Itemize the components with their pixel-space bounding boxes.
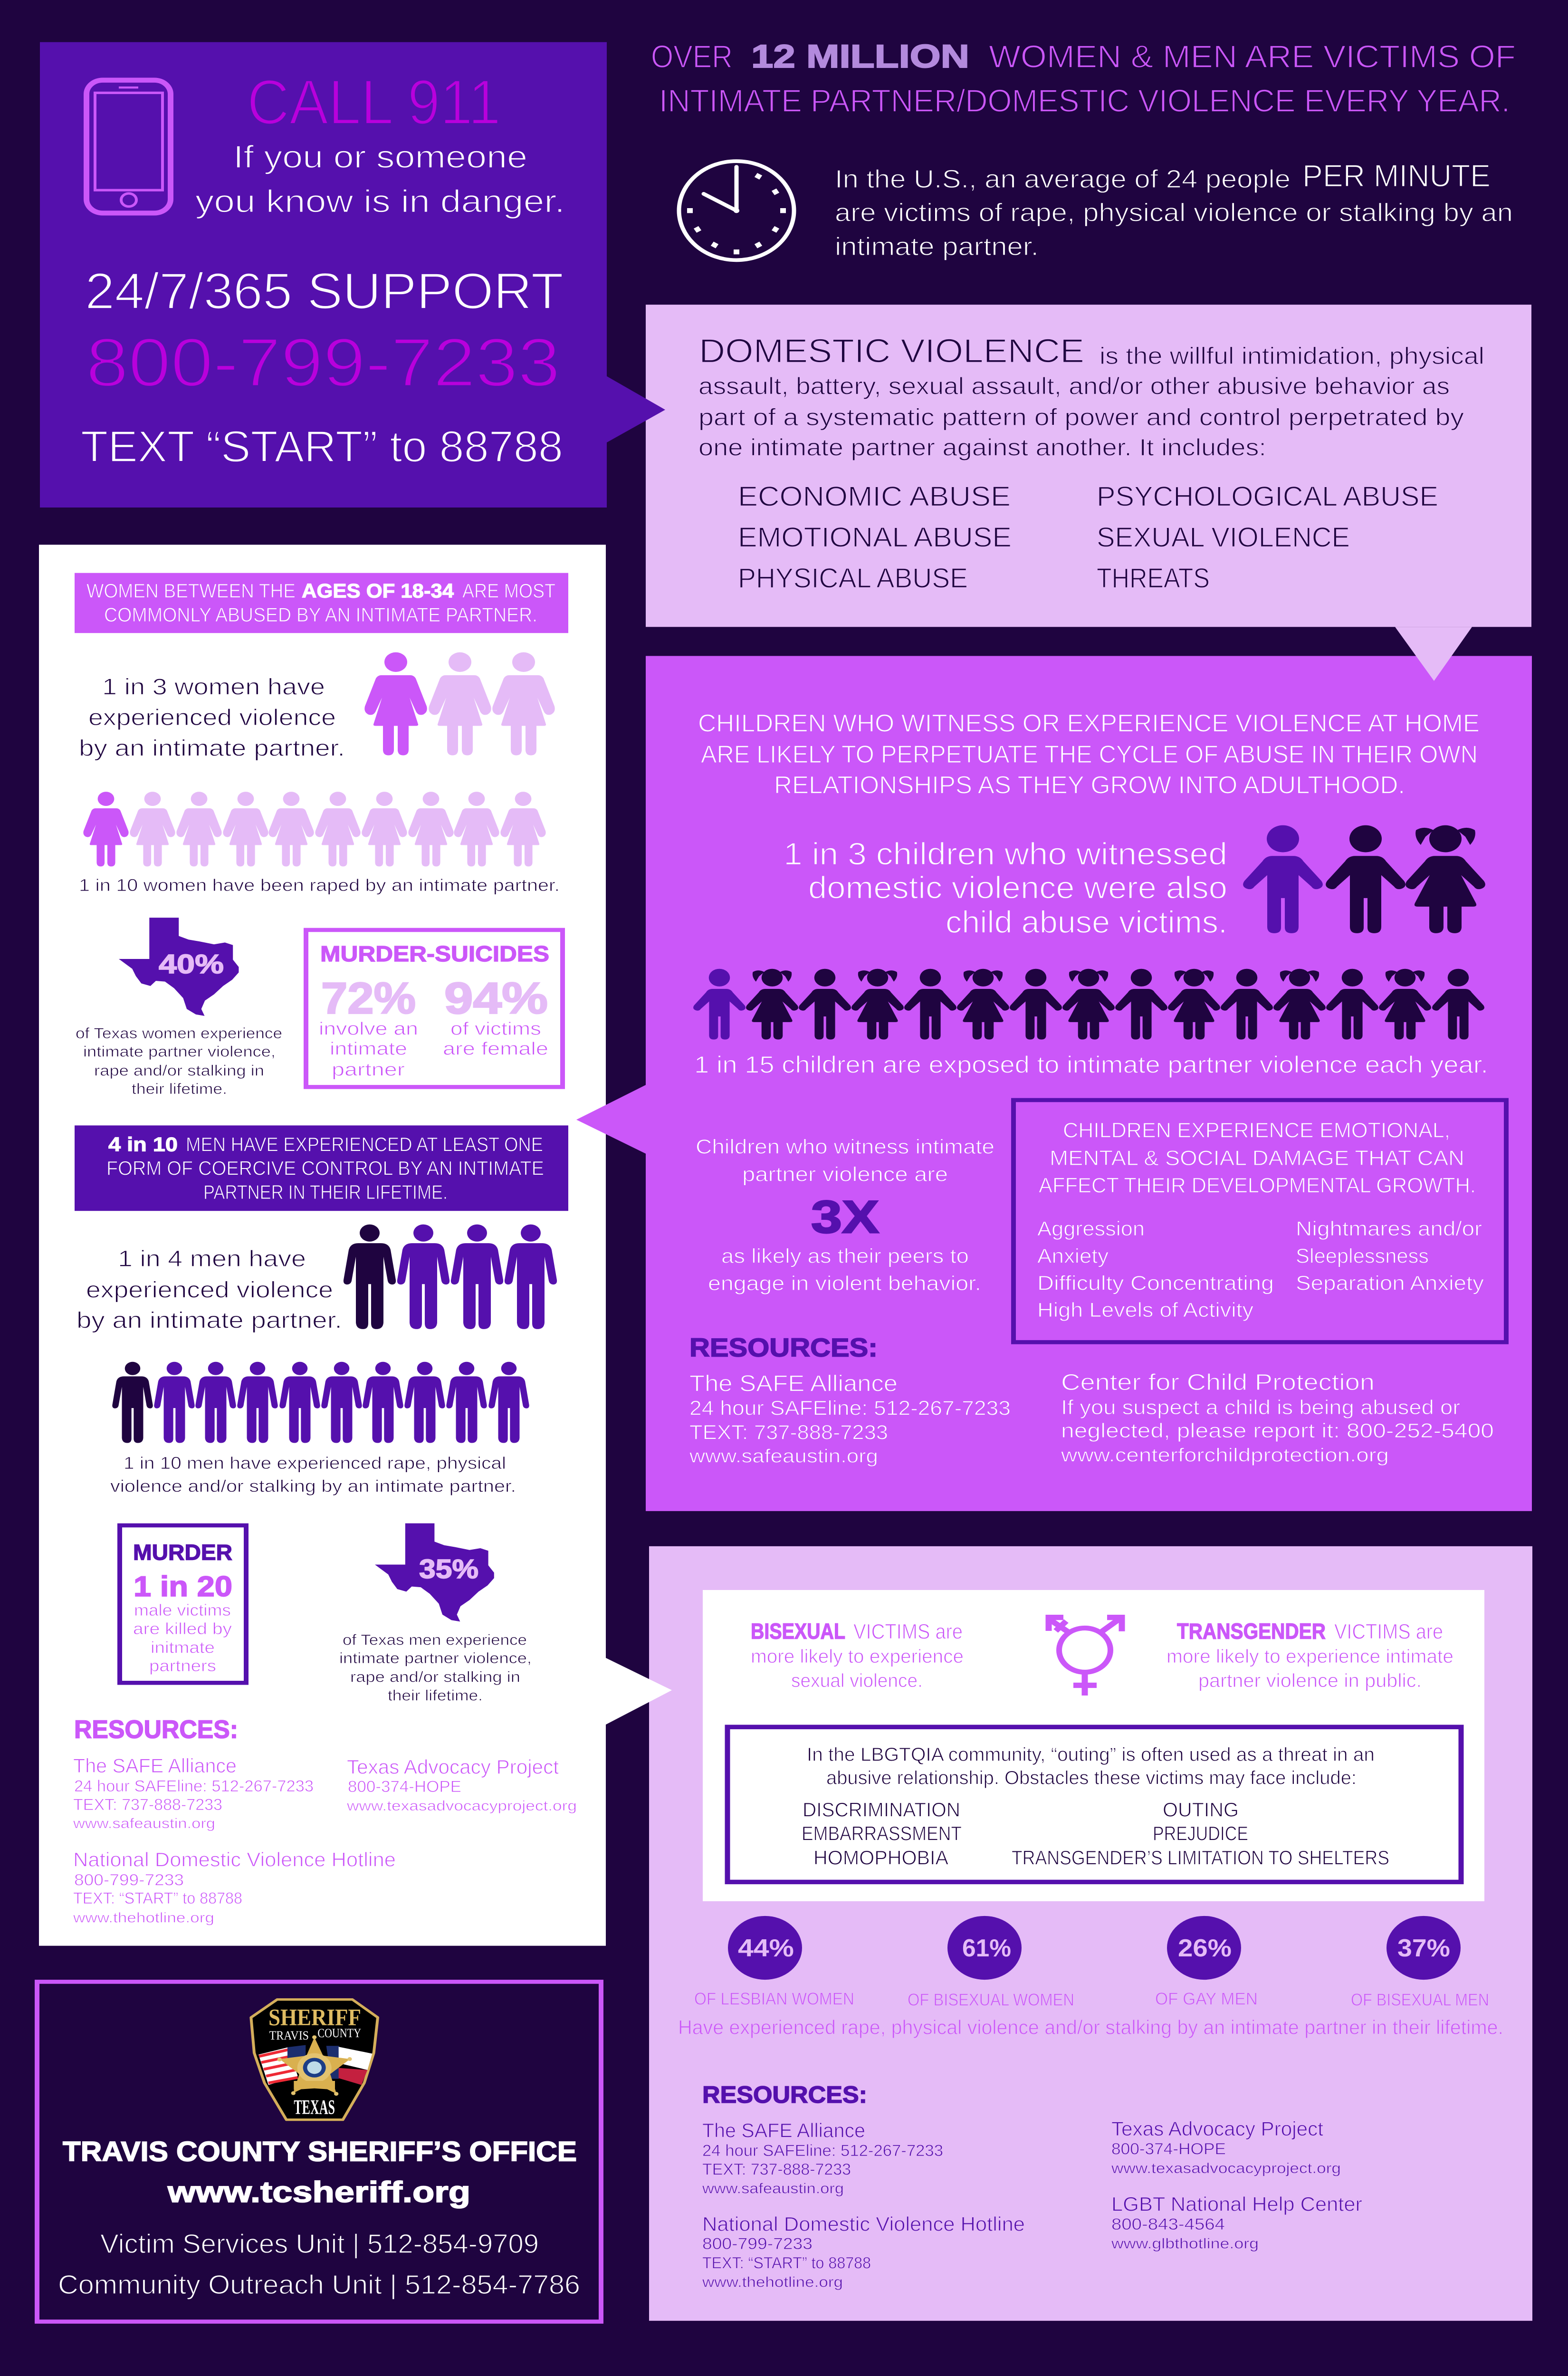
resources: LGBTQIA panel [702, 2082, 1362, 2290]
definition text: is the willful intimidation, physical [1100, 343, 1484, 369]
children heading: RELATIONSHIPS AS THEY GROW INTO ADULTHOOD. [774, 771, 1405, 799]
resources: children panel: TEXT: 737-888-7233 [689, 1421, 888, 1444]
resources: white panel: National Domestic Violence Hotline [73, 1849, 396, 1871]
abuse types list [738, 481, 1438, 594]
resources: white panel: TEXT: 737-888-7233 [73, 1795, 222, 1813]
stat: 1 in 3 women [79, 674, 345, 761]
callout: murder-suicides: 72% [321, 974, 416, 1023]
callout: murder-suicides [306, 930, 563, 1087]
banner: women ages: COMMONLY ABUSED BY AN INTIMATE PARTNER. [104, 604, 537, 626]
banner: women ages: AGES OF 18-34 [302, 580, 454, 602]
headline [651, 38, 1516, 119]
stat circles [728, 1916, 1461, 1980]
stat: 1 in 10 women: 1 in 10 women have been raped by an intimate partner. [79, 876, 560, 895]
icon: smartphone [86, 80, 171, 213]
stat: 3X: Children who witness intimate [696, 1135, 994, 1158]
transgender victims text [1166, 1619, 1453, 1691]
resources: children panel: The SAFE Alliance [689, 1371, 898, 1397]
callout: developmental damage: Aggression [1037, 1217, 1145, 1240]
callout: developmental damage: AFFECT THEIR DEVELOPMENTAL GROWTH. [1039, 1174, 1476, 1198]
banner: men coercive control: FORM OF COERCIVE CONTROL BY AN INTIMATE [106, 1158, 544, 1179]
bisexual victims text: sexual violence. [791, 1670, 923, 1691]
per minute statistic: In the U.S., an average of 24 people [835, 165, 1291, 193]
callout: murder 1 in 20 [120, 1525, 246, 1683]
bisexual victims text: more likely to experience [751, 1646, 964, 1667]
resources: white panel: www.texasadvocacyproject.org [346, 1798, 577, 1813]
transgender victims text: VICTIMS are [1334, 1620, 1443, 1644]
stat: 1 in 10 men [110, 1454, 516, 1496]
stat: 1 in 3 women: by an intimate partner. [79, 736, 345, 761]
resources: children panel: 24 hour SAFEline: 512-267-7233 [689, 1397, 1011, 1419]
Texas women text [76, 1025, 282, 1097]
hotline: 800-799-7233 [86, 324, 560, 401]
resources: white panel: 800-374-HOPE [348, 1777, 461, 1795]
resources: LGBTQIA panel: www.texasadvocacyproject.org [1111, 2160, 1341, 2177]
resources: LGBTQIA panel: Texas Advocacy Project [1111, 2118, 1324, 2140]
icons: ten women [83, 792, 546, 866]
banner: women ages: WOMEN BETWEEN THE [86, 580, 296, 602]
resources: LGBTQIA panel: RESOURCES: [702, 2082, 867, 2108]
callout: murder-suicides: involve an [319, 1018, 418, 1039]
banner: men coercive control: MEN HAVE EXPERIENCED AT LEAST ONE [186, 1134, 543, 1156]
sheriff contact units: Community Outreach Unit | 512-854-7786 [58, 2270, 580, 2300]
panel: children [646, 656, 1532, 1511]
stat: 1 in 3 children: domestic violence were also [808, 871, 1227, 905]
abuse types list: EMOTIONAL ABUSE [738, 522, 1012, 553]
callout: developmental damage: Anxiety [1037, 1245, 1109, 1267]
stat labels: OF BISEXUAL WOMEN [908, 1991, 1074, 2010]
hotline [81, 262, 564, 471]
icon: Texas 35% [375, 1523, 494, 1621]
resources: children panel: Center for Child Protection [1061, 1370, 1375, 1395]
hotline: TEXT “START” to 88788 [81, 422, 563, 471]
icon: clock [679, 161, 794, 260]
resources: white panel: Texas Advocacy Project [347, 1756, 559, 1778]
icons: ten men [112, 1362, 529, 1443]
resources: white panel: 800-799-7233 [74, 1870, 184, 1889]
sheriff contact units [58, 2229, 580, 2300]
icon: sheriff badge: COUNTY [317, 2027, 361, 2041]
stat: 3X: 3X [811, 1191, 879, 1243]
stat: 1 in 15 children: 1 in 15 children are exposed to intimate partner violence each year. [694, 1052, 1488, 1078]
stat: 1 in 3 women: experienced violence [88, 705, 336, 730]
callout: outing obstacles: TRANSGENDER’S LIMITATION TO SHELTERS [1012, 1847, 1389, 1869]
callout: developmental damage: Nightmares and/or [1296, 1217, 1482, 1240]
Texas women text: rape and/or stalking in [94, 1063, 264, 1079]
icons: three women [364, 652, 555, 756]
panel: LGBTQIA [649, 1546, 1532, 2321]
definition text: assault, battery, sexual assault, and/or other abusive behavior as [698, 373, 1450, 400]
bisexual victims text [751, 1619, 964, 1691]
per minute statistic: intimate partner. [835, 233, 1039, 261]
callout: outing obstacles: HOMOPHOBIA [813, 1847, 948, 1869]
resources: children panel: www.safeaustin.org [689, 1446, 878, 1467]
arrow: white panel pointer [606, 1658, 672, 1725]
resources: white panel [73, 1715, 577, 1926]
Texas men text: rape and/or stalking in [350, 1669, 520, 1686]
icons: four men [344, 1225, 557, 1329]
banner: women ages: ARE MOST [462, 580, 555, 602]
callout: developmental damage: Separation Anxiety [1296, 1272, 1484, 1294]
Texas women text: intimate partner violence, [83, 1044, 276, 1060]
arrow: call panel pointer [607, 376, 665, 442]
stat: 1 in 4 men: by an intimate partner. [76, 1308, 342, 1333]
icon: Texas 40%: 40% [159, 949, 224, 979]
stat circles: 37% [1397, 1934, 1450, 1962]
Texas men text: intimate partner violence, [339, 1650, 532, 1667]
banner: women ages [75, 573, 568, 633]
stat circles: 26% [1178, 1934, 1232, 1962]
definition text: DOMESTIC VIOLENCE [699, 333, 1084, 370]
banner: men coercive control: PARTNER IN THEIR LIFETIME. [203, 1181, 448, 1203]
per minute statistic [835, 159, 1513, 261]
stat: 3X: partner violence are [742, 1163, 948, 1186]
callout: murder-suicides: 94% [444, 974, 548, 1023]
stat: 1 in 3 children: child abuse victims. [946, 905, 1227, 940]
icon: sheriff badge: SHERIFF [268, 2004, 361, 2030]
resources: LGBTQIA panel: TEXT: “START” to 88788 [702, 2253, 871, 2272]
callout: murder-suicides: intimate [330, 1038, 407, 1059]
panel: call 911 [40, 42, 607, 508]
stat circles: 61% [962, 1934, 1011, 1962]
headline: OVER [651, 39, 733, 75]
resources: LGBTQIA panel: LGBT National Help Center [1111, 2193, 1362, 2215]
arrow: definition panel pointer [1395, 627, 1472, 681]
icons: fifteen children [693, 969, 1484, 1040]
resources: children panel: neglected, please report it: 800-252-5400 [1061, 1419, 1494, 1442]
transgender victims text: more likely to experience intimate [1166, 1646, 1453, 1667]
resources: children panel: www.centerforchildprotection.org [1061, 1445, 1389, 1466]
callout: murder 1 in 20: male victims [134, 1601, 231, 1619]
stat: 3X [696, 1135, 994, 1294]
hotline: 24/7/365 SUPPORT [85, 262, 564, 320]
stat circles: 44% [738, 1934, 794, 1962]
callout: outing obstacles: OUTING [1163, 1799, 1239, 1821]
callout: murder-suicides: are female [443, 1038, 548, 1059]
abuse types list: SEXUAL VIOLENCE [1097, 522, 1350, 553]
icon: transgender symbol [1048, 1618, 1122, 1696]
callout: developmental damage: Difficulty Concentrating [1037, 1272, 1274, 1294]
headline: WOMEN & MEN ARE VICTIMS OF [989, 39, 1516, 75]
stat labels: OF LESBIAN WOMEN [694, 1990, 854, 2009]
stat: 1 in 3 children [784, 837, 1227, 940]
stat: 1 in 4 men [76, 1246, 342, 1333]
bisexual victims text: BISEXUAL [751, 1619, 845, 1644]
callout: murder 1 in 20: are killed by [133, 1619, 232, 1638]
resources: white panel: TEXT: “START” to 88788 [73, 1889, 242, 1907]
resources: white panel: www.safeaustin.org [73, 1815, 215, 1831]
callout: developmental damage: Sleeplessness [1296, 1245, 1429, 1267]
resources: LGBTQIA panel: 800-374-HOPE [1111, 2139, 1226, 2158]
stat labels [678, 1990, 1503, 2039]
resources: LGBTQIA panel: 800-799-7233 [702, 2234, 813, 2253]
bisexual victims text: VICTIMS are [853, 1620, 963, 1644]
stat labels: OF BISEXUAL MEN [1351, 1991, 1489, 2010]
resources: LGBTQIA panel: www.thehotline.org [702, 2274, 843, 2290]
callout: outing obstacles: abusive relationship. Obstacles these victims may face include: [826, 1768, 1357, 1789]
callout: developmental damage [1013, 1100, 1506, 1342]
resources: white panel: RESOURCES: [74, 1715, 238, 1744]
abuse types list: THREATS [1097, 563, 1210, 594]
resources: LGBTQIA panel: www.glbthotline.org [1111, 2236, 1259, 2252]
stat: 3X: engage in violent behavior. [708, 1272, 981, 1294]
panel: sheriff's office [37, 1982, 601, 2322]
headline: 12 MILLION [751, 38, 969, 75]
sheriff name and website: TRAVIS COUNTY SHERIFF’S OFFICE [63, 2136, 577, 2167]
danger text: you know is in danger. [195, 184, 565, 219]
callout: developmental damage: High Levels of Activity [1037, 1298, 1254, 1321]
abuse types list: PHYSICAL ABUSE [738, 563, 968, 594]
danger text: If you or someone [233, 139, 527, 175]
callout: outing obstacles: PREJUDICE [1153, 1823, 1248, 1845]
callout: outing obstacles: DISCRIMINATION [803, 1799, 960, 1821]
panel: domestic violence definition [646, 305, 1531, 627]
resources: LGBTQIA panel: 800-843-4564 [1111, 2215, 1225, 2233]
Texas men text [339, 1632, 532, 1704]
stat: 1 in 3 children: 1 in 3 children who witnessed [784, 837, 1227, 872]
abuse types list: PSYCHOLOGICAL ABUSE [1097, 481, 1438, 512]
icons: three children [1243, 825, 1485, 933]
transgender victims text: TRANSGENDER [1177, 1619, 1326, 1644]
callout: outing obstacles [727, 1727, 1461, 1882]
white card [703, 1590, 1484, 1901]
children heading [698, 709, 1480, 799]
callout: murder 1 in 20: MURDER [133, 1540, 232, 1564]
callout: outing obstacles: EMBARRASSMENT [802, 1823, 962, 1845]
per minute statistic: PER MINUTE [1302, 159, 1491, 193]
banner: men coercive control: 4 in 10 [108, 1134, 178, 1156]
callout: murder 1 in 20: initmate [151, 1638, 215, 1657]
resources: white panel: The SAFE Alliance [73, 1755, 237, 1777]
icon: Texas 40% [119, 918, 239, 1016]
call 911 heading: CALL 911 [247, 67, 501, 137]
icon: sheriff badge: TEXAS [294, 2096, 335, 2119]
stat: 1 in 3 women: 1 in 3 women have [102, 674, 325, 699]
resources: LGBTQIA panel: 24 hour SAFEline: 512-267-7233 [702, 2141, 943, 2159]
Texas women text: their lifetime. [132, 1081, 227, 1097]
resources: LGBTQIA panel: www.safeaustin.org [702, 2181, 844, 2197]
banner: men coercive control [75, 1125, 568, 1211]
stat: 1 in 4 men: experienced violence [86, 1277, 333, 1303]
callout: developmental damage: CHILDREN EXPERIENCE EMOTIONAL, [1063, 1119, 1450, 1142]
per minute statistic: are victims of rape, physical violence or stalking by an [835, 199, 1513, 227]
sheriff name and website: www.tcsheriff.org [167, 2176, 470, 2209]
definition text: one intimate partner against another. It includes: [698, 434, 1266, 461]
sheriff contact units: Victim Services Unit | 512-854-9709 [100, 2229, 539, 2259]
definition text: part of a systematic pattern of power and control perpetrated by [698, 404, 1464, 431]
sheriff name and website [63, 2136, 577, 2209]
arrow: children panel pointer [576, 1085, 646, 1154]
stat: 3X: as likely as their peers to [721, 1245, 969, 1267]
icon: Texas 35%: 35% [419, 1554, 478, 1584]
Texas men text: of Texas men experience [343, 1632, 527, 1648]
stat: 1 in 10 men: violence and/or stalking by an intimate partner. [110, 1477, 516, 1496]
callout: murder-suicides: of victims [450, 1018, 541, 1039]
panel: women and men statistics [39, 545, 606, 1946]
resources: white panel: 24 hour SAFEline: 512-267-7233 [74, 1777, 314, 1795]
resources: LGBTQIA panel: National Domestic Violence Hotline [702, 2213, 1025, 2235]
abuse types list: ECONOMIC ABUSE [738, 481, 1011, 512]
icon: sheriff badge: TRAVIS [269, 2029, 309, 2042]
callout: murder 1 in 20: 1 in 20 [134, 1570, 232, 1602]
Texas women text: of Texas women experience [76, 1025, 282, 1042]
danger text [195, 139, 565, 219]
stat: 1 in 4 men: 1 in 4 men have [118, 1246, 306, 1272]
resources: children panel: If you suspect a child is being abused or [1061, 1396, 1460, 1418]
resources: LGBTQIA panel: The SAFE Alliance [702, 2120, 865, 2142]
stat labels: OF GAY MEN [1155, 1990, 1258, 2009]
resources: white panel: www.thehotline.org [73, 1910, 214, 1926]
definition text [698, 333, 1484, 461]
callout: murder-suicides: MURDER-SUICIDES [320, 941, 549, 966]
resources: LGBTQIA panel: TEXT: 737-888-7233 [702, 2160, 851, 2178]
children heading: CHILDREN WHO WITNESS OR EXPERIENCE VIOLENCE AT HOME [698, 709, 1480, 737]
callout: murder 1 in 20: partners [149, 1657, 216, 1675]
transgender victims text: partner violence in public. [1198, 1670, 1422, 1691]
stat: 1 in 10 men: 1 in 10 men have experienced rape, physical [124, 1454, 506, 1473]
callout: developmental damage: MENTAL & SOCIAL DAMAGE THAT CAN [1050, 1146, 1464, 1170]
Texas men text: their lifetime. [388, 1687, 483, 1704]
callout: murder-suicides: partner [332, 1059, 405, 1080]
resources: children panel [689, 1333, 1494, 1467]
callout: outing obstacles: In the LBGTQIA community, “outing” is often used as a threat in an [807, 1744, 1375, 1765]
icon: sheriff badge [251, 2000, 378, 2120]
resources: children panel: RESOURCES: [689, 1333, 878, 1362]
